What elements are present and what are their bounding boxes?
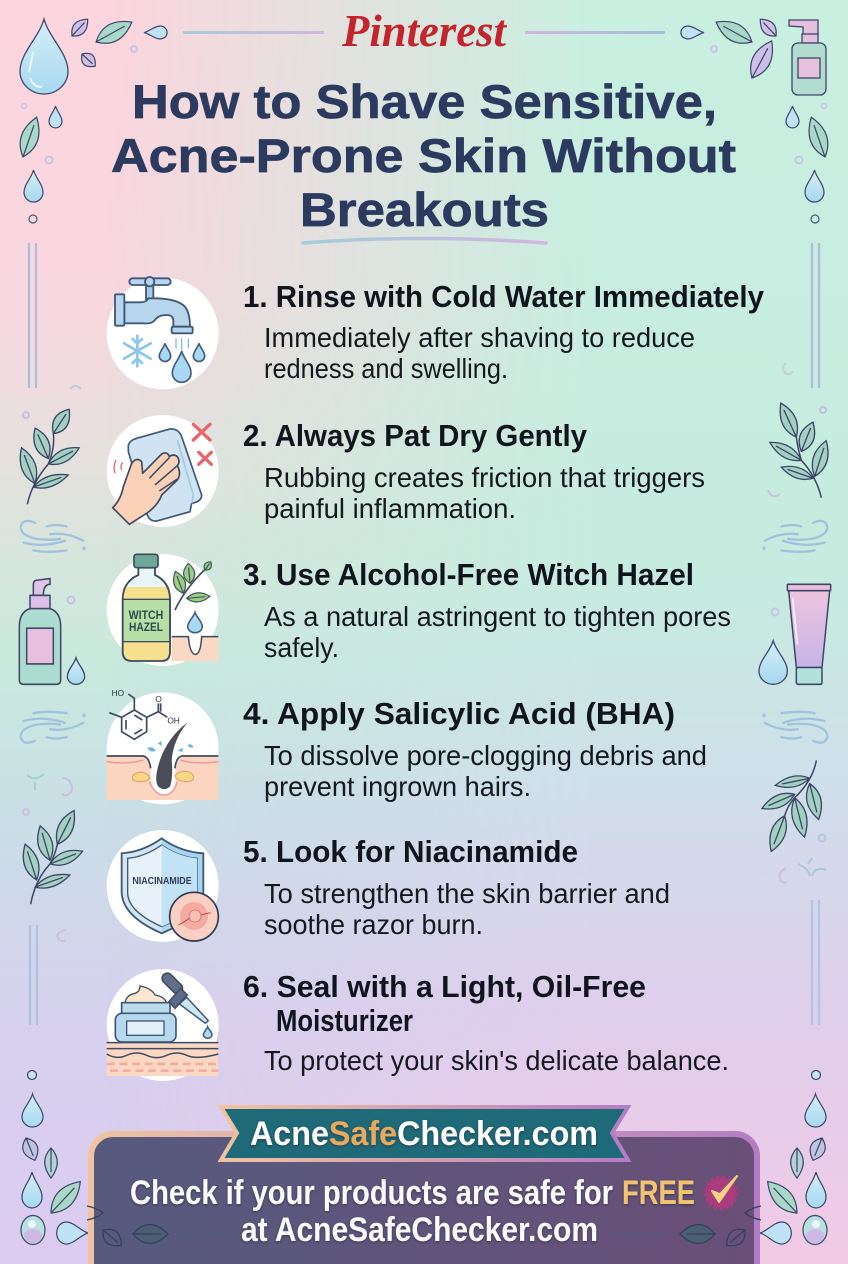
- icon: pump bottle: [789, 20, 826, 95]
- icon: cream tube and drop: [759, 584, 831, 684]
- icon: leaf branch upper right: [767, 400, 833, 498]
- icon: niacinamide shield: [107, 830, 219, 942]
- decorative corner: top left: [15, 14, 167, 388]
- step 6 heading: Moisturizer: [276, 1003, 413, 1038]
- title: Acne-Prone Skin Without: [111, 129, 736, 182]
- decorative corner: top right: [681, 14, 833, 388]
- step 3 text: safely.: [264, 632, 339, 663]
- wind lines right top: [763, 521, 827, 552]
- banner ribbon: [221, 1107, 628, 1160]
- pinterest logo: Pinterest: [341, 5, 507, 56]
- step 4 text: [264, 740, 707, 802]
- icon: faucet and cold drops: [107, 277, 219, 389]
- call to action line 1: Check if your products are safe for: [130, 1174, 613, 1212]
- icon: witch hazel bottle: WITCH: [129, 608, 163, 622]
- header line left: [183, 31, 324, 34]
- right side decorations: [759, 363, 833, 1025]
- icon: moisturizer jar and dropper: [107, 969, 219, 1081]
- title underline: [303, 238, 546, 243]
- step 5 text: soothe razor burn.: [264, 909, 483, 940]
- step 1 text: Immediately after shaving to reduce: [264, 322, 695, 353]
- step 6: [107, 969, 729, 1081]
- step 2: [107, 415, 705, 527]
- step 4 text: prevent ingrown hairs.: [264, 771, 531, 802]
- icon: niacinamide shield: NIACINAMIDE: [132, 876, 192, 887]
- step 2 heading: 2. Always Pat Dry Gently: [243, 418, 588, 453]
- step 4: [107, 688, 707, 804]
- left side decorations: [15, 386, 85, 1025]
- icon: salicylic acid and hair follicle: O: [155, 694, 162, 704]
- icon: leaf by bottle: [744, 37, 780, 82]
- wind lines right bottom: [763, 712, 827, 743]
- step 3 text: As a natural astringent to tighten pores: [264, 601, 731, 632]
- step 1: [107, 277, 765, 389]
- step 3 text: [264, 601, 731, 663]
- icon: big water drop: [20, 19, 68, 94]
- step 2 text: [264, 462, 705, 524]
- icon: witch hazel bottle: HAZEL: [129, 620, 163, 634]
- decorative corner: bottom left: [19, 1070, 88, 1244]
- step 4 text: To dissolve pore-clogging debris and: [264, 740, 707, 771]
- title: How to Shave Sensitive,: [132, 75, 717, 128]
- wind lines left bottom: [21, 712, 85, 743]
- icon: salicylic acid and hair follicle: [107, 688, 219, 804]
- step 5: [107, 830, 670, 942]
- step 1 heading: 1. Rinse with Cold Water Immediately: [243, 279, 765, 314]
- decorative corner: bottom right: [760, 1070, 829, 1244]
- call to action panel: [87, 1107, 761, 1264]
- header line right: [525, 31, 665, 34]
- step 6 heading: [243, 969, 646, 1038]
- FREE highlight: FREE: [622, 1174, 695, 1212]
- icon: witch hazel bottle: [107, 554, 219, 666]
- step 1 text: [264, 322, 695, 384]
- icon: salicylic acid and hair follicle: OH: [167, 715, 180, 725]
- icon: check badge: [706, 1176, 737, 1208]
- icon: salicylic acid and hair follicle: HO: [112, 688, 125, 698]
- step 6 heading: 6. Seal with a Light, Oil-Free: [243, 969, 646, 1004]
- step 5 text: To strengthen the skin barrier and: [264, 878, 670, 909]
- step 3: [107, 554, 731, 666]
- title: [111, 75, 736, 236]
- call to action line 2: at AcneSafeChecker.com: [241, 1211, 598, 1249]
- icon: pump bottle and drop: [19, 579, 85, 684]
- step 4 heading: 4. Apply Salicylic Acid (BHA): [243, 696, 675, 731]
- step 2 text: Rubbing creates friction that triggers: [264, 462, 705, 493]
- wind lines left top: [21, 521, 85, 552]
- step 2 text: painful inflammation.: [264, 493, 516, 524]
- step 6 text: To protect your skin's delicate balance.: [264, 1045, 729, 1076]
- step 5 heading: 5. Look for Niacinamide: [243, 834, 578, 869]
- icon: hand patting towel: [107, 415, 219, 527]
- icon: leaf branch upper left: [15, 405, 82, 504]
- banner text: AcneSafeChecker.com: [250, 1115, 598, 1153]
- step 5 text: [264, 878, 670, 940]
- icon: leaf branch lower left: [19, 807, 84, 904]
- step 3 heading: 3. Use Alcohol-Free Witch Hazel: [243, 557, 694, 592]
- title: Breakouts: [300, 183, 549, 236]
- icon: leaf branch lower right: [760, 760, 825, 854]
- step 1 text: redness and swelling.: [264, 353, 508, 384]
